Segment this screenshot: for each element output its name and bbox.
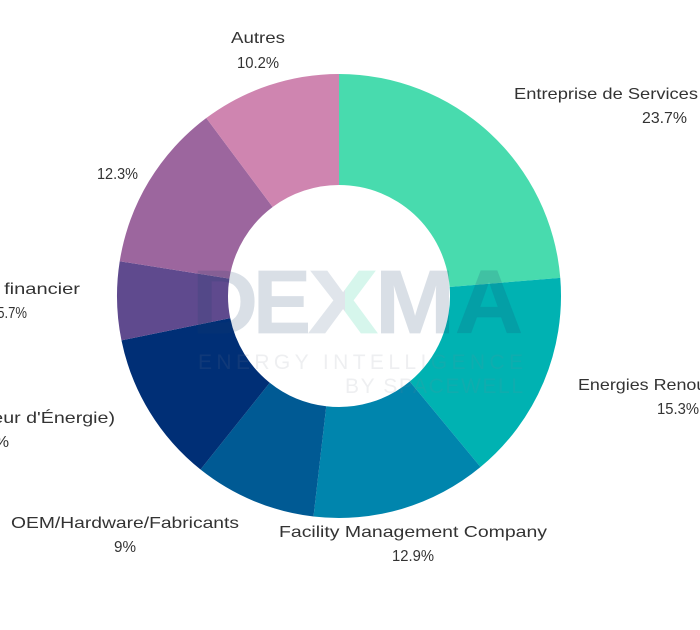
donut ring: [117, 74, 561, 518]
label: OEM/Hardware/Fabricants: 9%: [114, 539, 136, 556]
segment: 12.3%: [120, 118, 273, 279]
label: OEM/Hardware/Fabricants: [11, 515, 239, 556]
watermark logo: [198, 270, 522, 393]
label: 12.3%: 12.3%: [97, 166, 138, 183]
label: Energies Renouvelables: [578, 377, 700, 418]
segment: OEM/Hardware/Fabricants 9%: [200, 383, 326, 516]
label: Autres: 10.2%: [237, 55, 279, 72]
label: Fournisseur d'Énergie: [0, 408, 115, 451]
label: Autres: [231, 30, 285, 72]
logo wordmark: X: [308, 253, 378, 353]
label: Entreprise de Services: Entreprise de Services: [514, 86, 698, 103]
logo byline: BY SPACEWELL: [345, 375, 523, 398]
logo wordmark: X: [308, 253, 378, 353]
segment: Facility Management Company 12.9%: [314, 382, 481, 518]
label: Entreprise de Services: 23.7%: [642, 110, 687, 127]
segment: Autres 10.2%: [206, 74, 339, 207]
label: Facility Management Company: [279, 524, 547, 565]
logo wordmark: A: [455, 253, 523, 353]
label: Autres: Autres: [231, 30, 285, 47]
label: Facility Management Company: Facility Management Company: [279, 524, 547, 541]
label: OEM/Hardware/Fabricants: OEM/Hardware/Fabricants: [11, 515, 239, 532]
logo tagline: ENERGY INTELLIGENCE: [198, 351, 523, 374]
segment: Fournisseur d'Énergie 10.9%: [121, 318, 270, 470]
segment: Entreprise de Services 23.7%: [339, 74, 560, 287]
segment: financier 5.7%: [117, 261, 230, 340]
label: Facility Management Company: 12.9%: [392, 548, 434, 565]
logo wordmark: D: [192, 253, 258, 353]
segment: Energies Renouvelables 15.3%: [410, 278, 561, 467]
logo wordmark: E: [253, 253, 311, 353]
logo wordmark: M: [375, 253, 455, 353]
label: Entreprise de Services: [514, 86, 698, 127]
logo wordmark: [198, 270, 521, 334]
label: financier: [0, 281, 81, 322]
